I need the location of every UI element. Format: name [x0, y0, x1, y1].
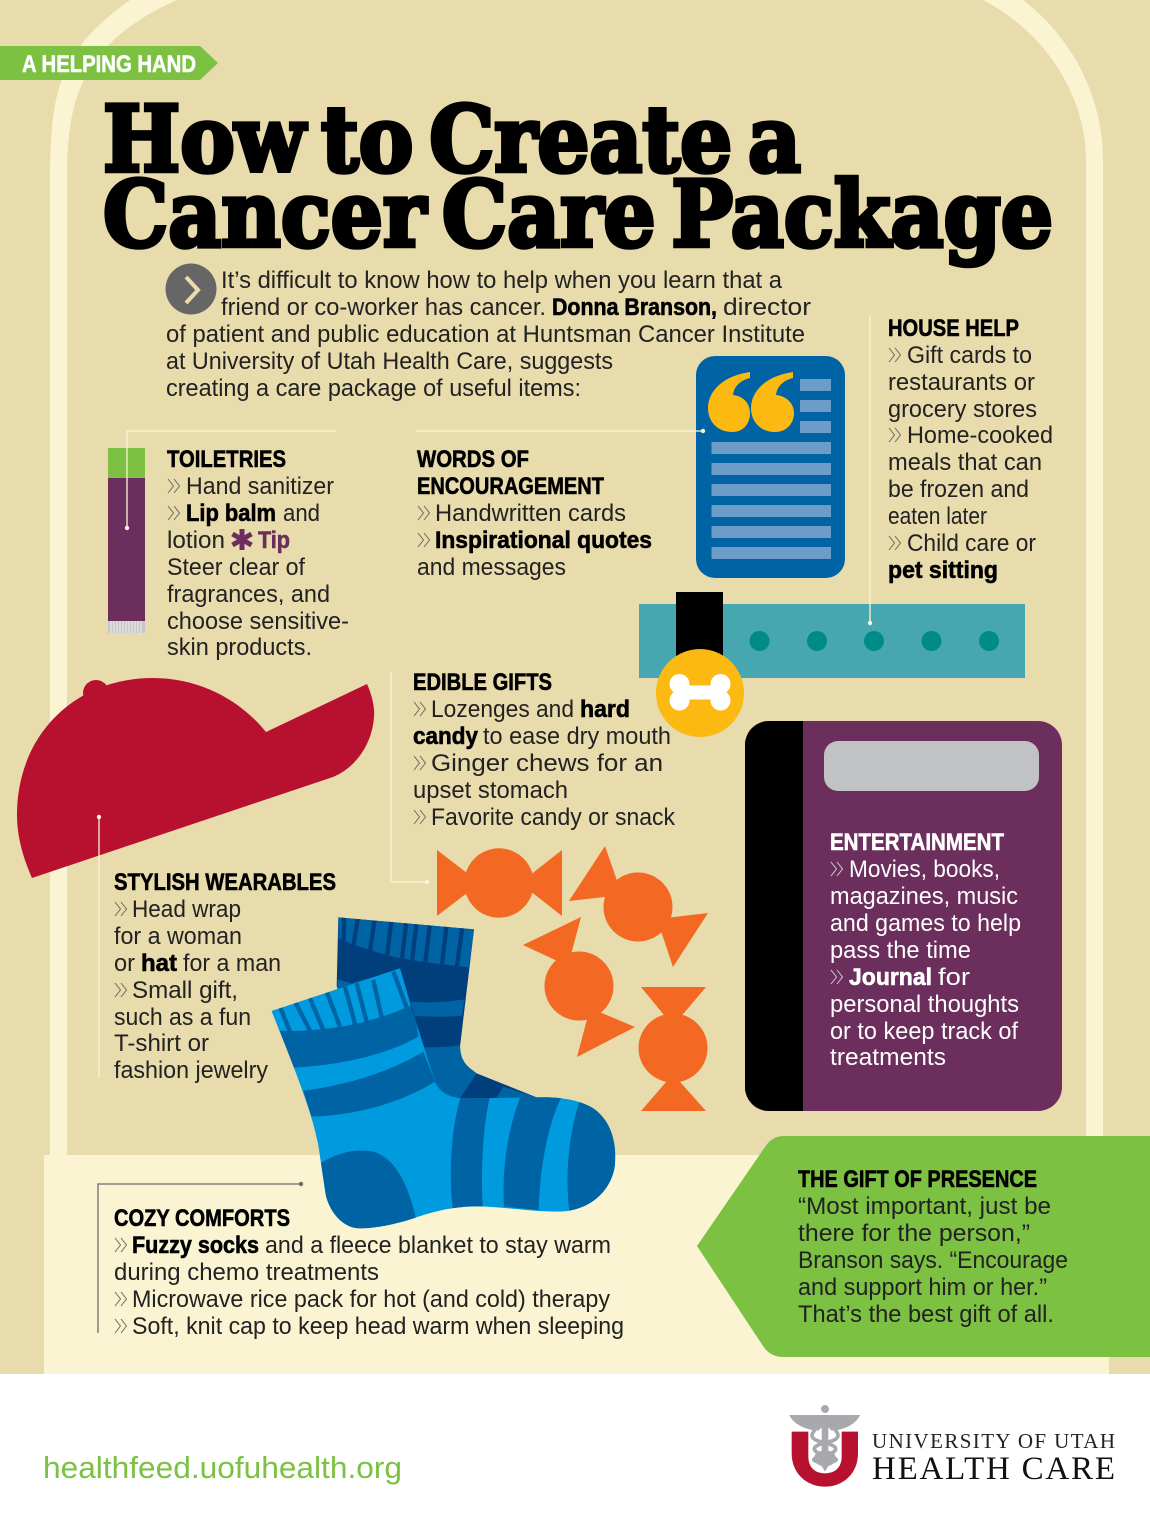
intro paragraph: friend or co-worker has cancer.	[221, 294, 546, 321]
intro paragraph: of patient and public education at Huntsman Cancer Institute	[166, 321, 805, 348]
text: house help: Gift cards to	[907, 342, 1032, 369]
icon: arrow bullet	[166, 264, 216, 314]
title	[103, 87, 1053, 268]
intro paragraph: Donna Branson,	[552, 294, 717, 321]
intro paragraph	[166, 264, 811, 402]
text: toiletries: fragrances, and	[167, 581, 330, 608]
text: stylish wearables: fashion jewelry	[114, 1057, 269, 1084]
text: cozy comforts: Microwave rice pack for hot (and cold) therapy	[132, 1286, 611, 1313]
text: entertainment: Journal	[849, 964, 932, 991]
footer band	[0, 1374, 1150, 1518]
intro paragraph: creating a care package of useful items:	[166, 375, 581, 402]
icon: lotion tube	[108, 448, 145, 633]
icon: socks	[260, 913, 627, 1233]
connector: edible gifts	[391, 672, 429, 884]
text: stylish wearables: Small gift,	[132, 977, 238, 1004]
connector: stylish wearables	[97, 815, 101, 1078]
panel: the gift of presence: That’s the best gift of all.	[798, 1301, 1054, 1328]
text: stylish wearables: T-shirt or	[114, 1030, 209, 1057]
connector: toiletries	[125, 431, 336, 530]
text: house help: Home-cooked	[907, 422, 1053, 449]
text: house help: Child care or	[907, 530, 1036, 557]
text: edible gifts	[413, 669, 676, 831]
panel: the gift of presence: THE GIFT OF PRESENCE	[798, 1166, 1037, 1193]
text: edible gifts: to ease dry mouth	[483, 723, 671, 750]
back sock	[333, 913, 537, 1107]
icon: book	[745, 721, 1062, 1111]
text: cozy comforts: and a fleece blanket to stay warm	[265, 1232, 611, 1259]
logo: university of utah health care: UNIVERSITY OF UTAH	[872, 1429, 1115, 1453]
text: words of encouragement: Handwritten cards	[435, 500, 626, 527]
text: edible gifts: Lozenges and	[431, 696, 574, 723]
text: house help: eaten later	[888, 503, 987, 530]
title: Cancer Care Package	[103, 162, 1053, 268]
text: cozy comforts: Soft, knit cap to keep head warm when sleeping	[132, 1313, 624, 1340]
text: house help: pet sitting	[888, 557, 998, 584]
text: house help	[888, 315, 1053, 584]
text: entertainment: Movies, books,	[849, 856, 1000, 883]
text: house help: restaurants or	[888, 369, 1035, 396]
section tag	[0, 46, 218, 80]
text: words of encouragement: WORDS OF	[417, 446, 529, 473]
text: toiletries: lotion	[167, 527, 225, 554]
text: house help: grocery stores	[888, 396, 1037, 423]
text: entertainment: or to keep track of	[830, 1018, 1018, 1045]
text: house help: meals that can	[888, 449, 1042, 476]
text: entertainment	[830, 829, 1021, 1071]
text: stylish wearables: for a man	[183, 950, 281, 977]
text: entertainment: treatments	[830, 1044, 946, 1071]
text: stylish wearables: hat	[141, 950, 177, 977]
icon: candies	[437, 846, 708, 1111]
footer url: healthfeed.uofuhealth.org	[43, 1450, 402, 1485]
text: house help: HOUSE HELP	[888, 315, 1019, 342]
text: edible gifts: hard	[580, 696, 630, 723]
logo: university of utah health care: HEALTH CARE	[872, 1451, 1115, 1487]
text: stylish wearables: such as a fun	[114, 1004, 251, 1031]
text: entertainment: pass the time	[830, 937, 971, 964]
text: stylish wearables: Head wrap	[132, 896, 241, 923]
text: entertainment: personal thoughts	[830, 991, 1019, 1018]
logo mark	[789, 1405, 860, 1487]
icon: cap	[17, 678, 374, 878]
text: cozy comforts	[114, 1205, 624, 1340]
text: toiletries: TOILETRIES	[167, 446, 286, 473]
text: entertainment: and games to help	[830, 910, 1021, 937]
connector: house help	[868, 316, 872, 625]
text: words of encouragement	[417, 446, 652, 581]
text: toiletries: Lip balm	[186, 500, 276, 527]
connector: words of encouragement	[416, 429, 705, 433]
intro paragraph: at University of Utah Health Care, suggests	[166, 348, 613, 375]
text: entertainment: ENTERTAINMENT	[830, 829, 1004, 856]
text: toiletries	[167, 446, 349, 661]
connector: cozy comforts	[98, 1182, 303, 1333]
text: words of encouragement: ENCOURAGEMENT	[417, 473, 604, 500]
text: stylish wearables: or	[114, 950, 135, 977]
text: cozy comforts: during chemo treatments	[114, 1259, 379, 1286]
text: edible gifts: EDIBLE GIFTS	[413, 669, 552, 696]
text: toiletries: skin products.	[167, 634, 312, 661]
panel: the gift of presence: Branson says. “Encourage	[798, 1247, 1068, 1274]
text: house help: be frozen and	[888, 476, 1029, 503]
text: toiletries: Hand sanitizer	[186, 473, 334, 500]
text: cozy comforts: COZY COMFORTS	[114, 1205, 290, 1232]
text: toiletries: Tip	[258, 527, 290, 554]
cream panel	[44, 1155, 1109, 1375]
text: toiletries: choose sensitive-	[167, 608, 349, 635]
panel: the gift of presence: and support him or her.”	[798, 1274, 1047, 1301]
text: stylish wearables: STYLISH WEARABLES	[114, 869, 336, 896]
text: entertainment: for	[938, 964, 970, 991]
text: stylish wearables	[114, 869, 336, 1084]
intro paragraph: director	[723, 294, 811, 321]
text: cozy comforts: Fuzzy socks	[132, 1232, 259, 1259]
text: edible gifts: Ginger chews for an	[431, 750, 663, 777]
background arch	[50, 0, 1103, 1160]
text: edible gifts: Favorite candy or snack	[431, 804, 676, 831]
panel: the gift of presence	[697, 1136, 1150, 1357]
text: edible gifts: upset stomach	[413, 777, 568, 804]
section tag: A HELPING HAND	[22, 51, 196, 78]
panel: the gift of presence: there for the person,”	[798, 1220, 1030, 1247]
title: How to Create a	[103, 87, 801, 193]
text: entertainment: magazines, music	[830, 883, 1018, 910]
icon: document with quotation marks	[696, 356, 845, 578]
logo: university of utah health care	[789, 1405, 1115, 1487]
panel: the gift of presence: “Most important, just be	[798, 1193, 1051, 1220]
intro paragraph: It’s difficult to know how to help when you learn that a	[221, 267, 782, 294]
text: edible gifts: candy	[413, 723, 478, 750]
text: words of encouragement: Inspirational quotes	[435, 527, 652, 554]
text: toiletries: and	[283, 500, 320, 527]
icon: dog collar	[639, 592, 1025, 737]
text: words of encouragement: and messages	[417, 554, 566, 581]
text: stylish wearables: for a woman	[114, 923, 242, 950]
text: toiletries: Steer clear of	[167, 554, 305, 581]
